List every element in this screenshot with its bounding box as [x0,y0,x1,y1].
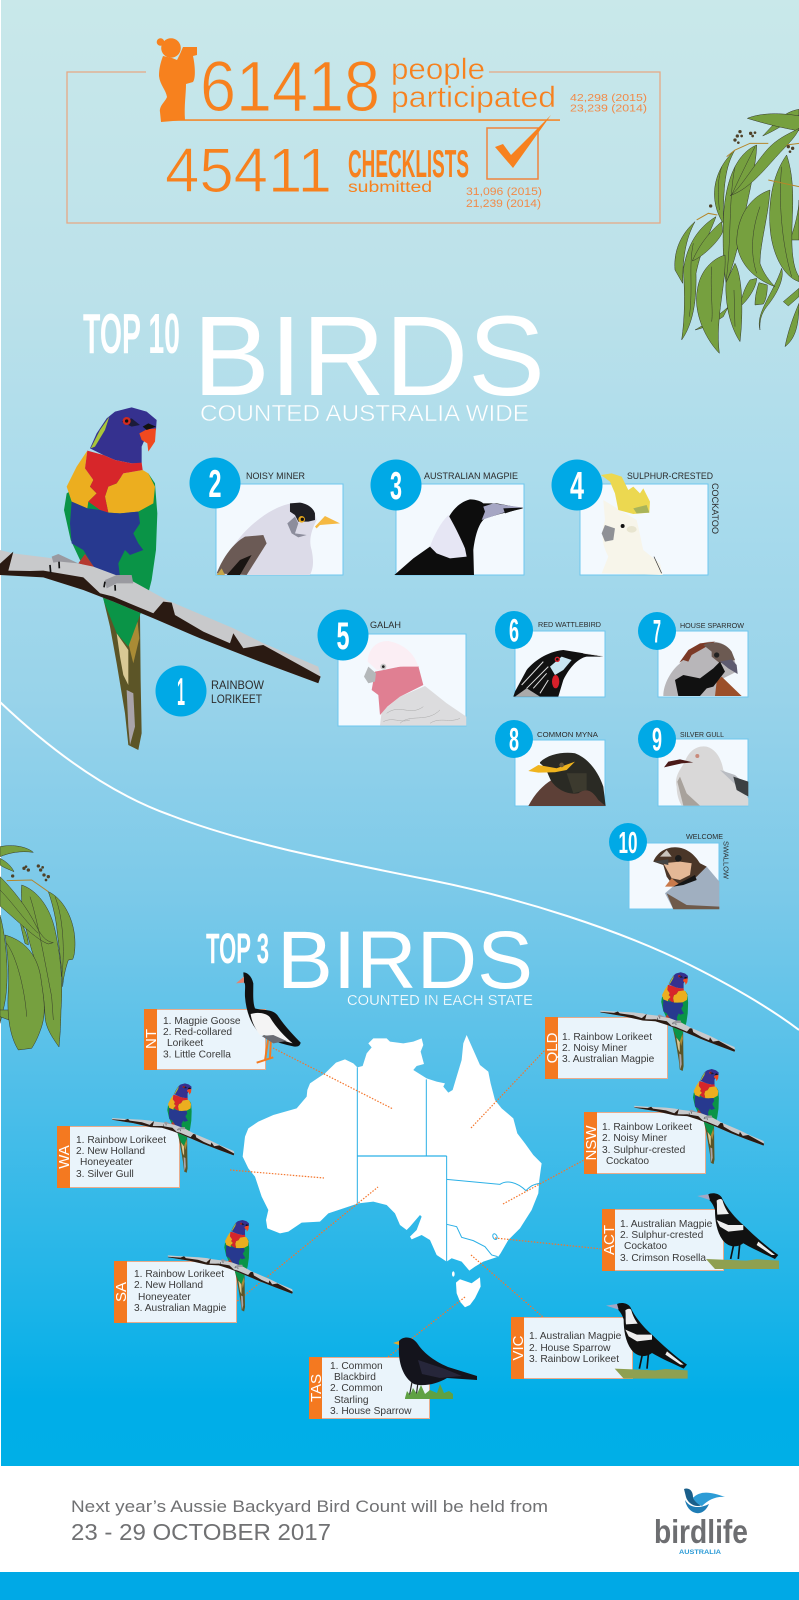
panel: australian magpie [370,460,524,575]
people caption: participated [391,81,556,114]
callout: SA: SA [113,1282,130,1302]
illustration: gull [664,746,748,806]
name continued vertical: COCKATOO [710,483,720,534]
tasmania [456,1277,481,1307]
top 3 label: TOP 3 [206,925,269,973]
submitted label: submitted [348,179,432,196]
rank 4 badge [552,460,602,510]
rank 9 badge: 9 [652,722,662,758]
panel: silver gull [638,720,748,806]
NT list: 3. Little Corella [163,1050,231,1060]
rank 7 badge: 7 [653,614,661,650]
WA list: Honeyeater [80,1157,133,1168]
callout: VIC: VIC [510,1335,527,1361]
subheading: COUNTED IN EACH STATE [347,993,533,1009]
callout: VIC [510,1317,632,1379]
curved white divider [0,702,799,1030]
rank 8 badge: 8 [509,722,519,758]
illustration: SA lorikeet [168,1220,293,1311]
callout: ACT [601,1209,724,1271]
NT list: Lorikeet [167,1038,203,1049]
birdlife logo [654,1489,748,1556]
rank 5 badge: 5 [336,615,350,658]
illustration: ACT magpie [697,1193,779,1269]
illustration: QLD lorikeet [600,972,735,1071]
name: SULPHUR-CRESTED [627,471,713,481]
previous years participants: 42,298 (2015) [570,92,647,104]
SA list: 1. Rainbow Lorikeet [134,1269,224,1280]
NT list: 1. Magpie Goose [163,1016,241,1027]
illustration: blackbird [393,1337,477,1399]
rank 2 badge: 2 [208,463,222,506]
NSW list: Cockatoo [606,1156,649,1167]
people count: 61418 [200,48,380,127]
ACT list: 3. Crimson Rosella [620,1253,706,1264]
panel: red wattlebird [495,611,605,697]
TAS list: Starling [334,1395,369,1406]
SA list: 3. Australian Magpie [134,1303,227,1314]
NSW list: 2. Noisy Miner [602,1133,668,1144]
name: GALAH [370,620,401,630]
title: top 3 birds [206,915,533,1009]
panel: participation stats: CHECKLISTS [348,143,469,186]
rank 1 label: LORIKEET [211,694,262,706]
birds heading: BIRDS [193,293,545,419]
illustration: NSW lorikeet [634,1069,764,1164]
rank 4 badge: 4 [570,465,584,508]
illustration: noisy miner [217,503,340,575]
name: SILVER GULL [680,730,724,739]
bird 1: rainbow lorikeet on branch [0,407,321,750]
TAS list: 3. House Sparrow [330,1406,412,1417]
name: HOUSE SPARROW [680,621,745,630]
footer band [0,1466,799,1572]
ACT list: 2. Sulphur-crested [620,1230,704,1241]
next count date: 23 - 29 OCTOBER 2017 [71,1519,331,1545]
previous years checklists [466,186,542,210]
ACT list: Cockatoo [624,1241,667,1252]
illustration: swallow [653,847,719,909]
subheading: COUNTED AUSTRALIA WIDE [200,400,529,426]
callout: QLD: QLD [544,1032,561,1063]
icon: logo bird [684,1489,725,1513]
australia tag: AUSTRALIA [679,1549,721,1556]
panel: noisy miner [190,458,343,575]
callout: NT: NT [143,1029,160,1049]
callout: TAS [308,1337,477,1419]
SA list: Honeyeater [138,1292,191,1303]
illustration: sparrow [663,642,742,696]
name: COMMON MYNA [537,730,598,739]
illustration: WA lorikeet [112,1083,234,1173]
SA list: 2. New Holland [134,1280,203,1291]
illustration: cockatoo [601,473,663,575]
WA list: 2. New Holland [76,1146,145,1157]
NSW list: 3. Sulphur-crested [602,1145,686,1156]
rank 2 badge [190,458,240,508]
callout: NT [143,972,301,1070]
VIC list: 3. Rainbow Lorikeet [529,1354,619,1365]
title: top 10 birds [83,293,545,426]
mainland [243,1035,542,1271]
stats frame [67,72,660,223]
rank 5 badge [318,610,368,660]
rank 3 badge [370,460,422,510]
panel: galah [318,610,466,726]
name continued vertical: SWALLOW [722,841,730,880]
callout: NSW [583,1112,706,1174]
panel: house sparrow [638,612,748,697]
icon: tick box [487,115,551,179]
state borders [357,1067,540,1262]
rank 3 badge: 3 [390,465,402,508]
rank 1 label: RAINBOW [211,680,264,692]
panel: common myna [495,720,606,806]
dotted leader lines [230,1048,602,1357]
name: NOISY MINER [246,471,305,481]
rank 1 label [211,680,264,706]
callout: WA: WA [56,1145,73,1169]
name: AUSTRALIAN MAGPIE [424,471,518,481]
previous years participants [570,92,647,114]
panel: participation stats [67,38,660,223]
title: top 10 birds: TOP 10 [83,302,180,366]
icon: gum leaves left [0,846,75,1050]
callout: TAS: TAS [308,1374,325,1402]
icon: gum leaves top right [675,109,799,353]
QLD list: 1. Rainbow Lorikeet [562,1032,652,1043]
callout: ACT: ACT [601,1225,618,1255]
WA list: 1. Rainbow Lorikeet [76,1135,166,1146]
king island [452,1271,455,1277]
previous years checklists: 31,096 (2015) [466,186,542,198]
rank 1 badge [156,666,206,716]
callout: WA [56,1126,180,1188]
footer text [71,1498,548,1545]
name: RED WATTLEBIRD [538,620,602,629]
callout: QLD [544,1017,668,1079]
birds heading: BIRDS [277,915,533,1006]
icon: person with binoculars [157,38,197,122]
illustration: magpie [394,499,523,575]
VIC list: 1. Australian Magpie [529,1331,622,1342]
previous years participants: 23,239 (2014) [570,102,647,114]
TAS list: 1. Common [330,1361,383,1372]
name: WELCOME [686,832,723,841]
next count notice: Next year’s Aussie Backyard Bird Count will be held from [71,1498,548,1516]
previous years checklists: 21,239 (2014) [466,198,541,210]
rank 10 badge: 10 [618,825,638,860]
VIC list: 2. House Sparrow [529,1343,611,1354]
illustration: VIC magpie [606,1303,688,1379]
map of australia [243,1035,542,1307]
bottom blue band [0,1572,799,1600]
illustration: wattlebird [513,650,603,697]
QLD list: 3. Australian Magpie [562,1054,655,1065]
illustration: magpie goose [236,972,301,1063]
people caption [391,53,556,114]
NT list: 2. Red-collared [163,1027,232,1038]
ACT list: 1. Australian Magpie [620,1219,713,1230]
TAS list: Blackbird [334,1372,376,1383]
NSW list: 1. Rainbow Lorikeet [602,1122,692,1133]
wordmark: birdlife [654,1513,748,1550]
illustration: galah [364,641,466,726]
callout: SA [113,1261,236,1323]
orange rule [162,119,560,121]
WA list: 3. Silver Gull [76,1169,134,1180]
rank 1 badge: 1 [177,671,185,714]
TAS list: 2. Common [330,1383,383,1394]
panel: sulphur-crested cockatoo [552,460,720,575]
illustration: myna [528,753,606,806]
QLD list: 2. Noisy Miner [562,1043,628,1054]
panel: welcome swallow [609,823,730,909]
callout: NSW: NSW [583,1125,600,1160]
rank 6 badge: 6 [509,612,519,648]
checklists count: 45411 [165,136,332,206]
people caption: people [391,53,485,86]
